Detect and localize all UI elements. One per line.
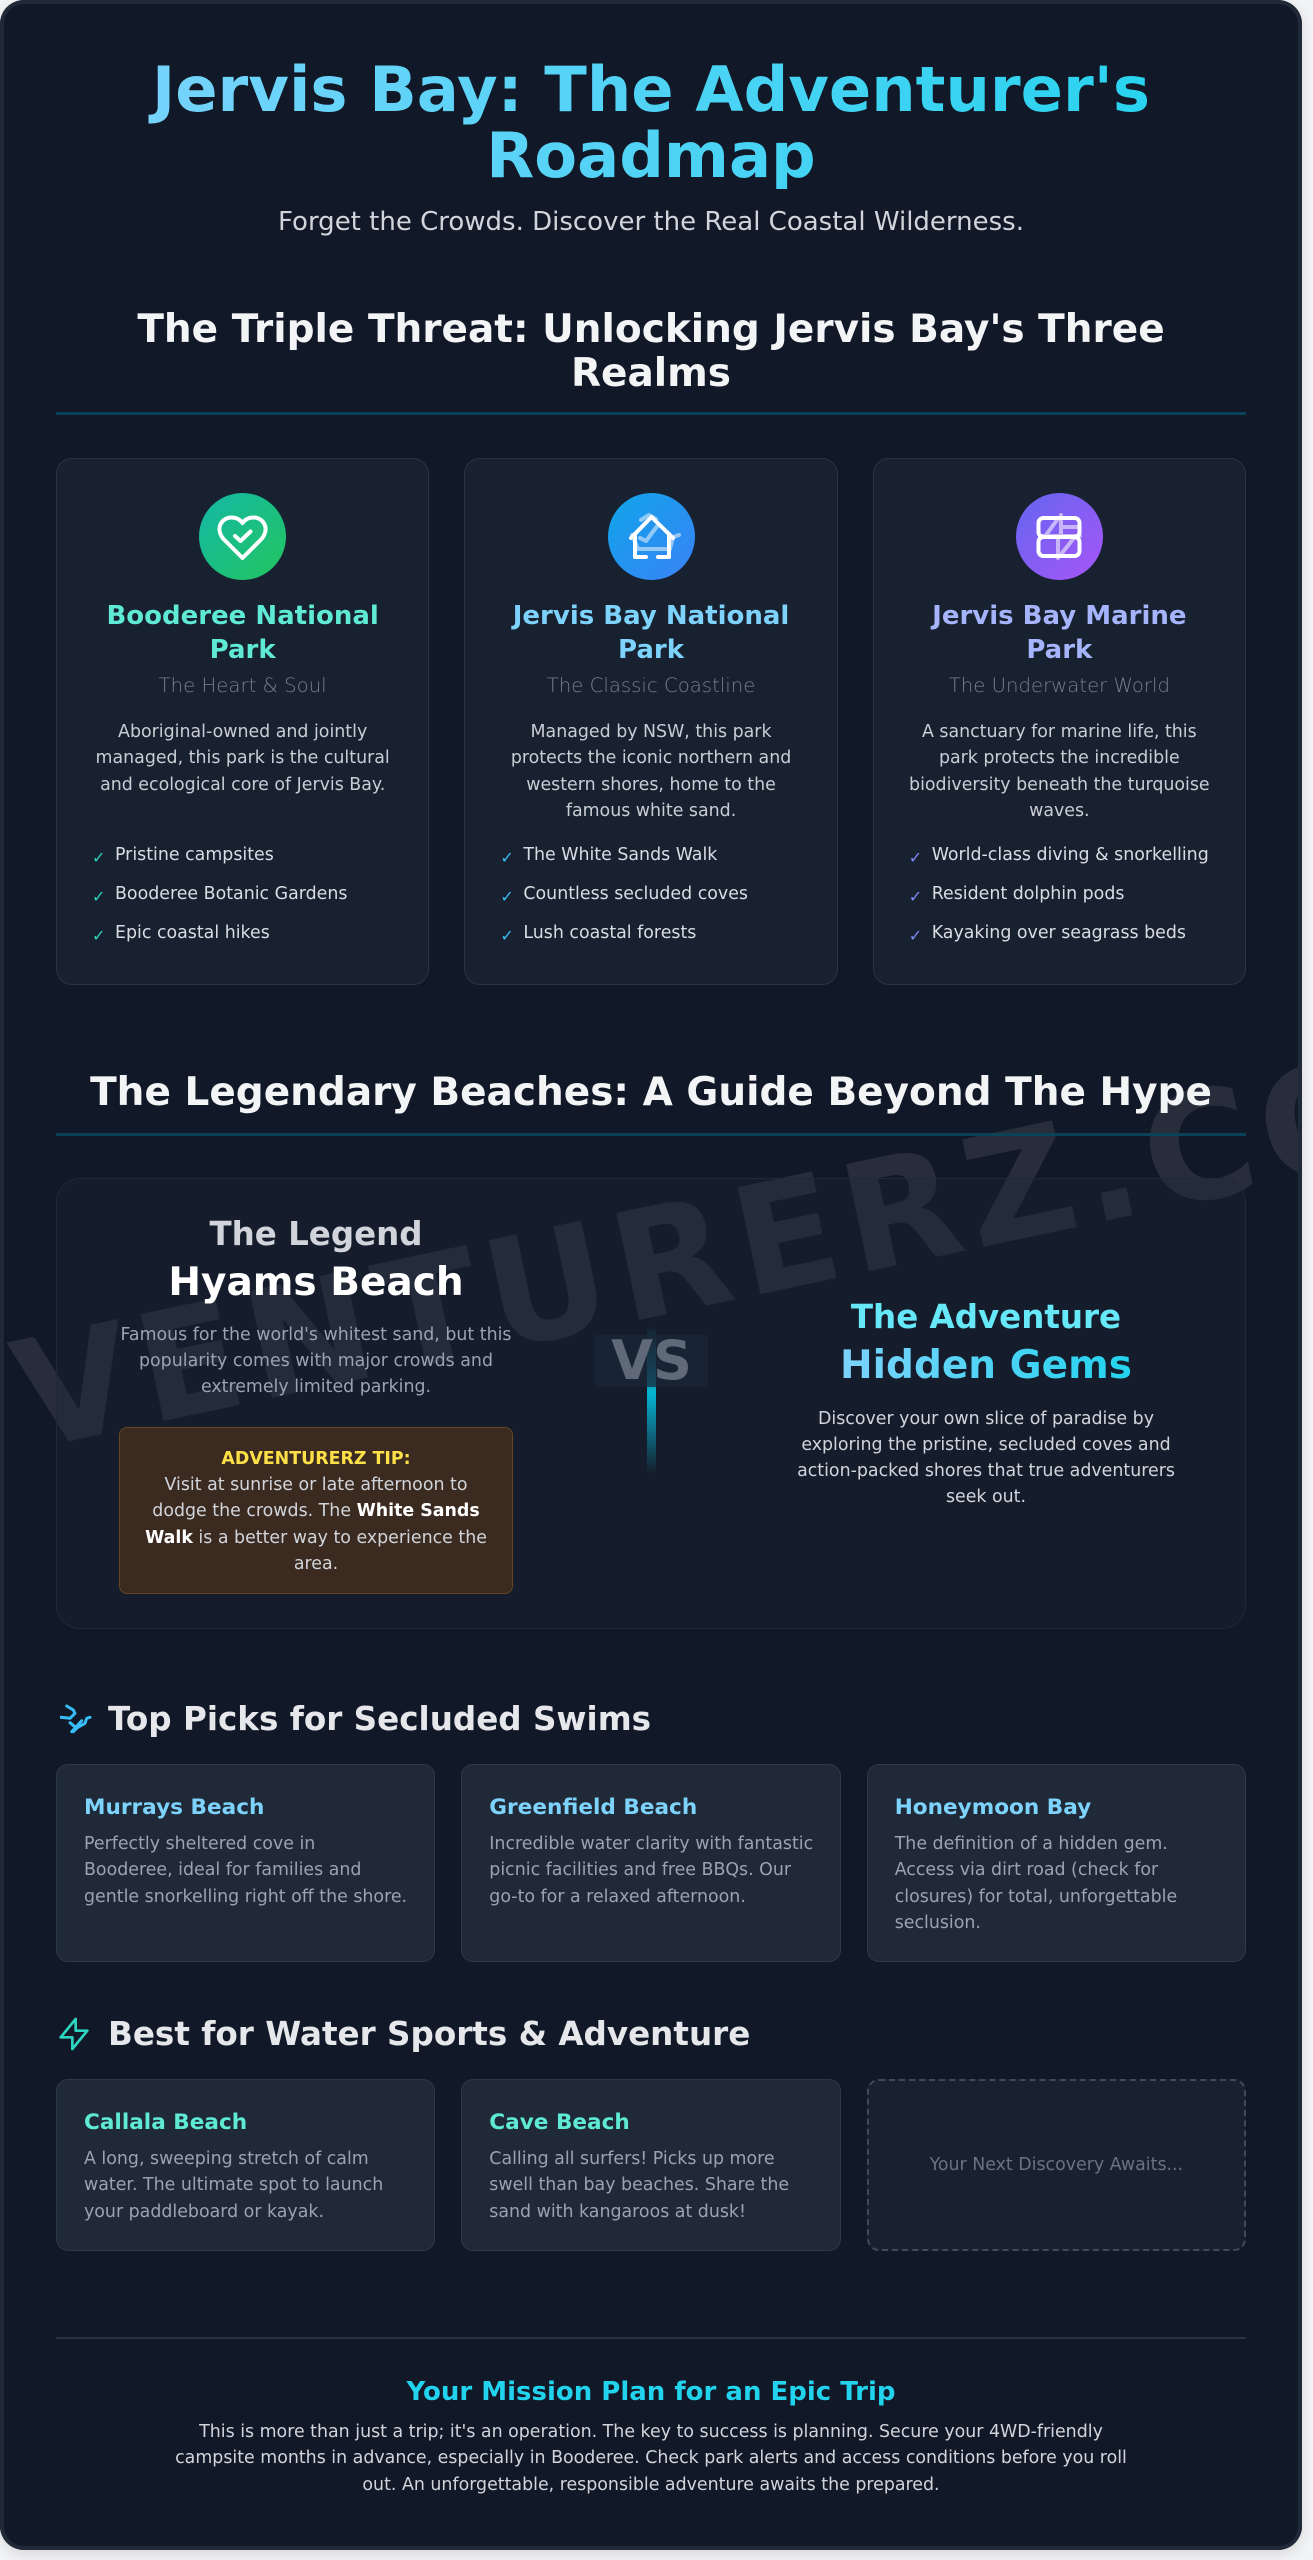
description: go-to for a relaxed afternoon.: [489, 1887, 746, 1907]
beach name: Hyams Beach: [168, 1260, 464, 1305]
list item: ✓: [92, 886, 105, 906]
card tagline: The Classic Coastline: [547, 674, 755, 697]
description: gentle snorkelling right off the shore.: [84, 1887, 407, 1907]
description: Access via dirt road (check for: [895, 1860, 1158, 1880]
title: [56, 57, 1246, 189]
description: water. The ultimate spot to launch: [84, 2175, 383, 2195]
vs badge: VS: [611, 1329, 692, 1392]
list item: ✓: [909, 848, 922, 866]
list item: Pristine campsites: [115, 844, 274, 864]
list item: World-class diving & snorkelling: [932, 844, 1209, 864]
icon: swimmer: [60, 1704, 92, 1734]
card description: park protects the incredible: [939, 748, 1180, 768]
list item: ✓: [909, 926, 922, 944]
card description: A sanctuary for marine life, this: [922, 722, 1197, 742]
heading: three realms: Realms: [571, 351, 731, 396]
description: [489, 2149, 789, 2222]
description: [894, 1834, 1177, 1933]
beach card: Cave: [461, 2079, 841, 2251]
subheading: secluded swims: Top Picks for Secluded Swims: [108, 1700, 651, 1738]
name: Cave Beach: [489, 2110, 630, 2135]
card description: [96, 722, 390, 795]
description: A long, sweeping stretch of calm: [84, 2149, 369, 2169]
list item: Kayaking over seagrass beds: [932, 922, 1186, 942]
description: Incredible water clarity with fantastic: [489, 1834, 813, 1854]
card description: Aboriginal-owned and jointly: [118, 722, 367, 742]
placeholder card: next discovery: Your Next Discovery Awaits...: [930, 2155, 1183, 2175]
description: seek out.: [946, 1487, 1026, 1507]
right column: the adventure: [797, 1298, 1175, 1507]
description: Perfectly sheltered cove in: [84, 1834, 315, 1854]
footer: mission plan: [175, 2377, 1127, 2495]
name: Honeymoon Bay: [895, 1795, 1091, 1820]
icon: heart with check: [199, 493, 286, 580]
card description: western shores, home to the: [526, 775, 776, 795]
card title: [511, 600, 789, 664]
list item: ✓: [92, 848, 105, 866]
name: Greenfield Beach: [489, 1795, 697, 1820]
description: [489, 1834, 813, 1907]
footer text: [175, 2422, 1127, 2495]
heading: three realms: The Triple Threat: Unlocking Jervis Bay's Three: [137, 307, 1165, 352]
list item: Countless secluded coves: [523, 884, 748, 904]
card description: biodiversity beneath the turquoise: [909, 775, 1210, 795]
list item: ✓: [500, 886, 514, 906]
callout: adventurerz tip: dodge the crowds. The White Sands: [152, 1501, 480, 1521]
left column: the legend: [119, 1214, 513, 1594]
panel: Jervis Bay National Park: [464, 458, 838, 985]
panel: legend versus adventure comparison: [56, 1178, 1246, 1629]
description: extremely limited parking.: [201, 1377, 431, 1397]
card description: famous white sand.: [566, 801, 736, 821]
name: Murrays Beach: [84, 1795, 264, 1820]
card title: Park: [618, 634, 684, 664]
card description: managed, this park is the cultural: [96, 748, 390, 768]
description: action-packed shores that true adventurers: [797, 1461, 1175, 1481]
footer text: out. An unforgettable, responsible adventure awaits the prepared.: [362, 2475, 940, 2495]
description: your paddleboard or kayak.: [84, 2202, 324, 2222]
beach card: Greenfield: [461, 1764, 841, 1962]
icon: house: [608, 493, 695, 580]
card description: [909, 722, 1210, 821]
description: [120, 1325, 512, 1397]
beach card: Honeymoon: [867, 1764, 1246, 1962]
description: [84, 1834, 407, 1907]
list item: The White Sands Walk: [523, 844, 717, 864]
card tagline: The Underwater World: [949, 674, 1170, 697]
card title: Booderee National: [106, 600, 379, 630]
description: closures) for total, unforgettable: [895, 1887, 1177, 1907]
list item: ✓: [909, 886, 922, 906]
name: Callala Beach: [84, 2110, 247, 2135]
description: sand with kangaroos at dusk!: [489, 2202, 746, 2222]
description: exploring the pristine, secluded coves and: [801, 1435, 1171, 1455]
callout: adventurerz tip: Walk is a better way to experience the: [145, 1528, 487, 1548]
divider line: [647, 1327, 656, 1473]
description: [797, 1408, 1175, 1507]
heading: legendary beaches: The Legendary Beaches: A Guide Beyond The Hype: [90, 1070, 1212, 1115]
description: Booderee, ideal for families and: [84, 1860, 361, 1880]
footer text: campsite months in advance, especially in Booderee. Check park alerts and access conditions before you roll: [175, 2448, 1127, 2468]
description: Calling all surfers! Picks up more: [489, 2149, 775, 2169]
description: seclusion.: [895, 1913, 981, 1933]
panel: Jervis Bay Marine Park: [873, 458, 1246, 985]
icon: grid: [1016, 493, 1103, 580]
description: The definition of a hidden gem.: [895, 1834, 1168, 1854]
list item: Lush coastal forests: [523, 922, 696, 942]
list item: ✓: [92, 926, 105, 944]
card tagline: The Heart & Soul: [159, 674, 327, 697]
subheading: water sports: Best for Water Sports & Adventure: [108, 2014, 750, 2052]
card description: and ecological core of Jervis Bay.: [100, 775, 385, 795]
beach card: Callala: [56, 2079, 435, 2251]
callout: adventurerz tip: area.: [294, 1554, 338, 1574]
card description: protects the iconic northern and: [511, 748, 791, 768]
description: popularity comes with major crowds and: [139, 1351, 493, 1371]
card title: Jervis Bay National: [513, 600, 789, 630]
panel: Booderee National Park: [56, 458, 429, 985]
card title: Park: [1026, 634, 1092, 664]
card description: Managed by NSW, this park: [531, 722, 772, 742]
list item: ✓: [500, 848, 514, 866]
label: The Legend: [209, 1214, 423, 1252]
footer text: This is more than just a trip; it's an operation. The key to success is planning. Secure your 4WD-friendly: [199, 2422, 1103, 2442]
card title: [930, 600, 1187, 664]
description: [84, 2149, 383, 2222]
card description: waves.: [1029, 801, 1090, 821]
description: swell than bay beaches. Share the: [489, 2175, 789, 2195]
card description: [511, 722, 791, 821]
list item: Epic coastal hikes: [115, 922, 270, 942]
callout: adventurerz tip: ADVENTURERZ TIP:: [221, 1449, 411, 1469]
description: picnic facilities and free BBQs. Our: [489, 1860, 791, 1880]
card title: [106, 600, 379, 664]
title: Jervis Bay: The Adventurer's: [152, 53, 1150, 126]
label: The Adventure: [851, 1298, 1121, 1336]
description: Famous for the world's whitest sand, but this: [120, 1325, 512, 1345]
icon: lightning bolt: [59, 2018, 89, 2050]
description: Discover your own slice of paradise by: [818, 1408, 1154, 1428]
beach card: Murrays: [56, 1764, 435, 1962]
vs badge: [595, 1335, 708, 1387]
card title: Park: [210, 634, 276, 664]
headline: Hidden Gems: [840, 1343, 1132, 1388]
list item: Resident dolphin pods: [932, 884, 1124, 904]
list item: Booderee Botanic Gardens: [115, 884, 347, 904]
callout: adventurerz tip: Visit at sunrise or late afternoon to: [165, 1475, 467, 1495]
callout: adventurerz tip: [119, 1427, 513, 1594]
heading: three realms: [137, 307, 1165, 396]
subtitle: Forget the Crowds. Discover the Real Coastal Wilderness.: [278, 207, 1024, 237]
placeholder card: next discovery: [867, 2079, 1246, 2251]
title: Roadmap: [486, 119, 816, 192]
list item: ✓: [500, 926, 514, 944]
footer heading: Your Mission Plan for an Epic Trip: [407, 2377, 895, 2407]
card title: Jervis Bay Marine: [932, 600, 1187, 630]
